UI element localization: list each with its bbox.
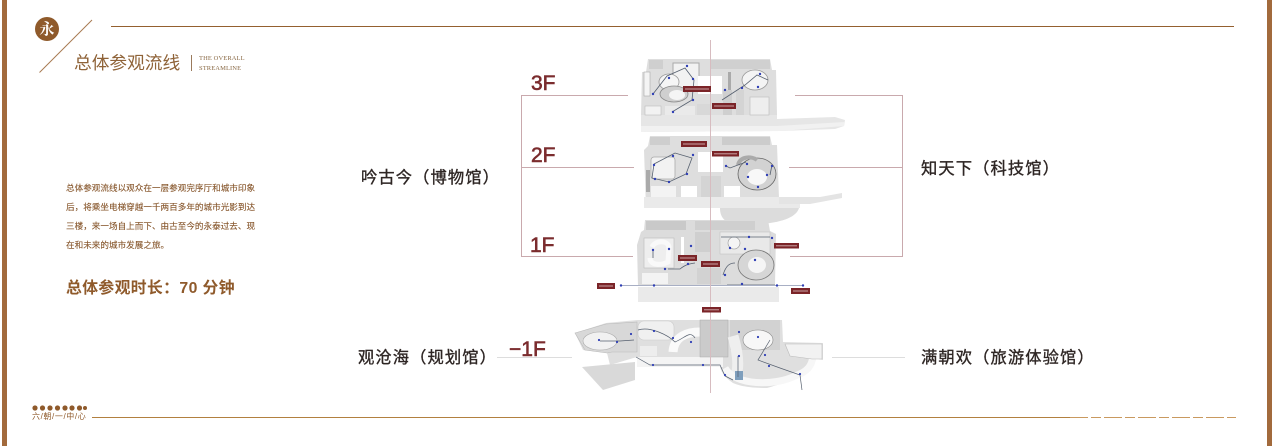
floor label: 1F: 1F — [530, 234, 555, 257]
hall name: tourism: 满朝欢（旅游体验馆） — [921, 349, 1095, 367]
bottom rule — [92, 417, 1236, 418]
description: 总体参观流线以观众在一层参观完序厅和城市印象 — [66, 183, 255, 193]
top rule — [111, 26, 1234, 27]
english subtitle — [199, 55, 245, 72]
hall name: science: 知天下（科技馆） — [921, 160, 1060, 178]
map labels — [597, 86, 810, 312]
seal character: 永 — [39, 18, 54, 39]
description line 4: 在和未来的城市发展之旅。 — [66, 240, 169, 250]
floor plan: 2F — [644, 136, 842, 225]
floor label: -1F: −1F — [509, 338, 546, 361]
icon: round seal badge — [35, 17, 59, 41]
hall name: planning: 观沧海（规划馆） — [358, 349, 497, 367]
left border — [2, 0, 7, 446]
english subtitle: THE OVERALL — [199, 55, 245, 62]
floor plan: -1F — [575, 320, 823, 390]
entrance flow line — [620, 284, 804, 287]
total visit duration: 总体参观时长：70 分钟 — [66, 280, 235, 297]
logo wordmark: 六/朝/一/中/心 — [32, 412, 86, 421]
logo — [32, 405, 87, 421]
header divider — [191, 55, 192, 71]
center axis — [710, 40, 711, 393]
description line 3: 三楼，来一场自上而下、由古至今的永泰过去、现 — [66, 221, 255, 231]
logo dots — [32, 405, 87, 411]
floor plan: 1F — [620, 220, 804, 302]
english subtitle: STREAMLINE — [199, 65, 241, 72]
floor plan: 3F — [641, 59, 845, 132]
description line 2: 后，将乘坐电梯穿越一千两百多年的城市光影到达 — [66, 202, 255, 212]
floor label: 2F: 2F — [531, 144, 556, 167]
hall name: museum: 吟古今（博物馆） — [361, 169, 500, 187]
title: 总体参观流线 — [74, 49, 180, 75]
diagonal header stroke — [40, 20, 92, 72]
right border — [1267, 0, 1272, 446]
floor bracket lines — [497, 96, 905, 358]
floor label: 3F: 3F — [531, 72, 556, 95]
